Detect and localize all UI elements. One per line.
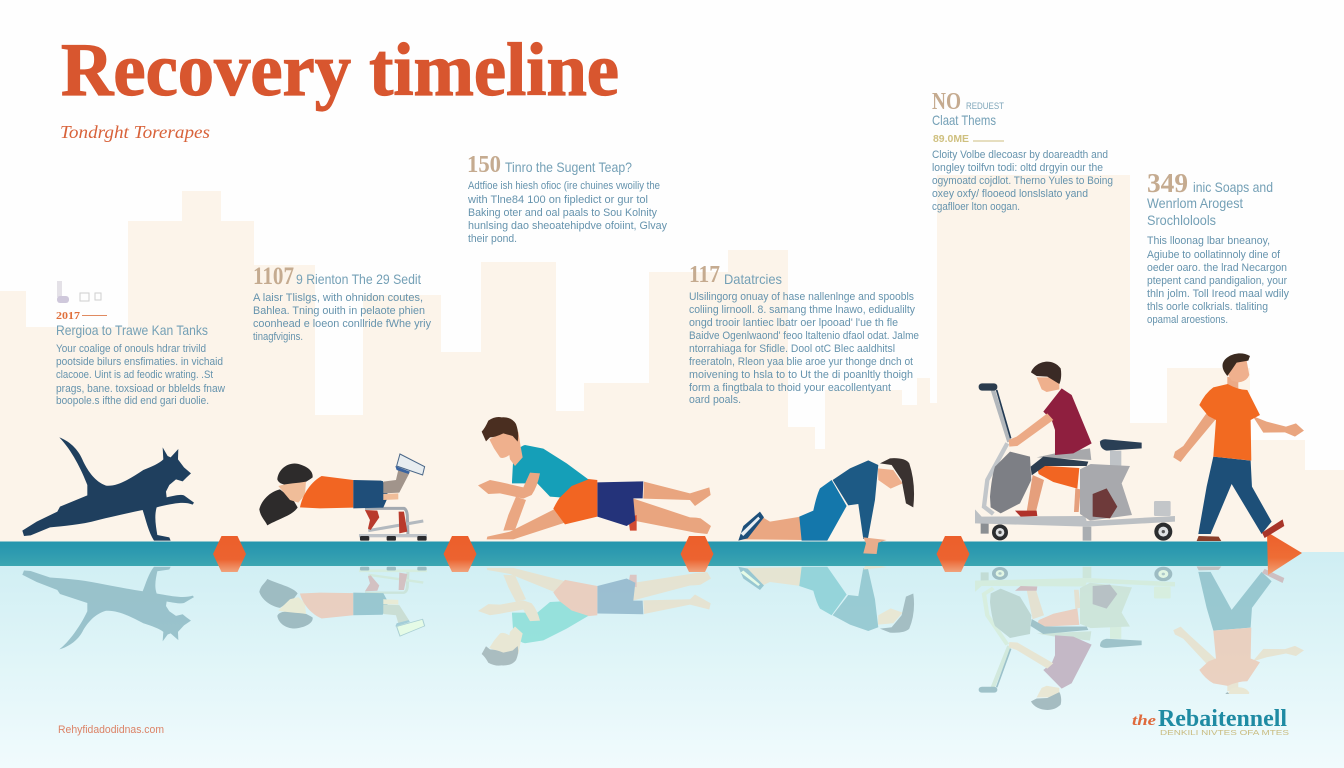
icon: small equipment — [57, 281, 101, 303]
body: Bahlea. Tning ouith in pelaote phien — [253, 305, 425, 317]
heading: Datatrcies — [724, 271, 782, 287]
body — [56, 343, 225, 407]
body: Baidve Ogenlwaond' feoo ltaltenio dfaol odat. Jalme — [689, 330, 919, 342]
small label: REDUEST — [966, 101, 1004, 111]
milestone marker 4 — [936, 536, 970, 572]
body: Baking oter and oal paals to Sou Kolnity — [468, 207, 657, 219]
subtitle: Tondrght Torerapes — [60, 122, 210, 142]
body: with Tlne84 100 on fipledict or gur tol — [467, 194, 648, 206]
text block: stage 5 — [932, 89, 1113, 213]
body: cgaflloer lton oogan. — [932, 201, 1020, 213]
text block: stage 4 — [689, 262, 919, 406]
water area with reflections — [0, 552, 1344, 768]
body: ongd trooir lantiec lbatr oer lpooad' l'ue th fle — [689, 317, 898, 329]
text block: stage 1 — [56, 281, 225, 407]
reflection: walking man — [1174, 566, 1304, 694]
logo: the — [1132, 713, 1156, 729]
figure: walking man — [1173, 353, 1304, 541]
date label: 89.0ME — [933, 134, 969, 145]
body: hunlsing dao sheoatehipdve ofoiint, Glvay — [468, 220, 667, 232]
text block: stage 2 — [253, 263, 431, 343]
body — [467, 180, 667, 245]
body — [253, 292, 431, 343]
heading: Srochlolools — [1147, 212, 1216, 228]
figure: dog in stretch pose — [22, 437, 194, 541]
number: 150 — [467, 152, 501, 178]
text block: stage 6 — [1147, 168, 1289, 326]
figure: man in plank — [478, 417, 711, 539]
reflection: man in plank — [478, 568, 711, 666]
body: Cloity Volbe dlecoasr by doareadth and — [932, 149, 1108, 161]
body: Adtfioe ish hiesh ofioc (ire chuines vwoiliy the — [468, 180, 660, 192]
body: Ulsilingorg onuay of hase nallenlnge and spoobls — [689, 291, 914, 303]
body: pootside bilurs ensfimaties. in vichaid — [56, 356, 223, 368]
body: boopole.s ifthe did end gari duolie. — [56, 395, 209, 407]
logo: DENKILI NIVTES OFA MTES — [1160, 730, 1289, 737]
heading: Claat Thems — [932, 112, 996, 128]
footer link: Rehyfidadodidnas.com — [58, 724, 164, 736]
logo — [1132, 706, 1289, 737]
body: form a fingtbala to thoid your eacollentyant — [689, 382, 891, 394]
body: coonhead e loeon conllride fWhe yriy — [253, 318, 431, 330]
heading: 9 Rienton The 29 Sedit — [296, 271, 421, 287]
body: thln jolm. Toll Ireod maal wdily — [1147, 288, 1289, 300]
body: freeratoln, Rleon yaa blie aroe yur thonge dnch ot — [689, 356, 913, 368]
body: ptepent cand pandigalion, your — [1147, 275, 1287, 287]
timeline end arrow — [1267, 532, 1302, 575]
logo: Rebaitennell — [1158, 706, 1287, 732]
body: moivening to hsla to to Ut the di poanltly thoigh — [689, 369, 913, 381]
body: oard poals. — [689, 394, 741, 406]
body — [1147, 235, 1289, 326]
reflection: crawling woman — [738, 556, 914, 633]
milestone marker 1 — [213, 536, 246, 572]
figure: crawling woman — [738, 458, 914, 554]
body: Agiube to oollatinnoly dine of — [1147, 249, 1281, 261]
heading: inic Soaps and — [1193, 179, 1273, 195]
figure: person on bench — [259, 454, 427, 541]
body — [689, 291, 919, 406]
timeline bar — [0, 542, 1270, 566]
text block: stage 3 — [467, 152, 667, 245]
body: prags, bane. toxsioad or bblelds fnaw — [56, 383, 225, 395]
year label: 2017 — [56, 310, 81, 322]
body: tinagfvigins. — [253, 331, 303, 343]
heading: Rergioa to Trawe Kan Tanks — [56, 322, 208, 338]
milestone marker 2 — [444, 536, 476, 572]
body: Your coalige of onouls hdrar trivild — [56, 343, 206, 355]
number: 117 — [689, 262, 720, 288]
reflection: dog — [22, 567, 194, 649]
body: thls oorle colkrials. tlaliting — [1147, 301, 1268, 313]
number: 349 — [1147, 168, 1188, 198]
background: cream city skyline — [0, 175, 1344, 560]
body: oeder oaro. the lrad Necargon — [1147, 262, 1287, 274]
body: ntorrahiaga for Sfidle. Dool otC Blec aaldhitsl — [689, 343, 895, 355]
body: opamal aroestions. — [1147, 314, 1228, 326]
title: Recovery timeline — [61, 29, 619, 112]
body: oxey oxfy/ flooeod lonslslato yand — [932, 188, 1088, 200]
body: A laisr Tlislgs, with ohnidon coutes, — [253, 292, 423, 304]
number: 1107 — [253, 263, 294, 290]
milestone marker 3 — [680, 536, 714, 572]
heading: Tinro the Sugent Teap? — [505, 159, 632, 175]
body: their pond. — [468, 233, 517, 245]
body: This lloonag lbar bneanoy, — [1147, 235, 1270, 247]
body: ogymoatd cojdlot. Therno Yules to Boing — [932, 175, 1113, 187]
number: NO — [932, 89, 961, 115]
figure: person on exercise machine — [975, 362, 1175, 541]
heading — [1147, 179, 1273, 228]
body: coliing lirnooll. 8. samang thme lnawo, edidualilty — [689, 304, 915, 316]
heading: Wenrlom Arogest — [1147, 195, 1243, 211]
body — [932, 149, 1113, 213]
reflection: person on bench — [259, 567, 427, 636]
body: clacooe. Uint is ad feodic wrating. .St — [56, 369, 213, 381]
body: longley toilfvn todi: oltd drgyin our the — [932, 162, 1103, 174]
reflection: person on exercise machine — [975, 567, 1175, 710]
